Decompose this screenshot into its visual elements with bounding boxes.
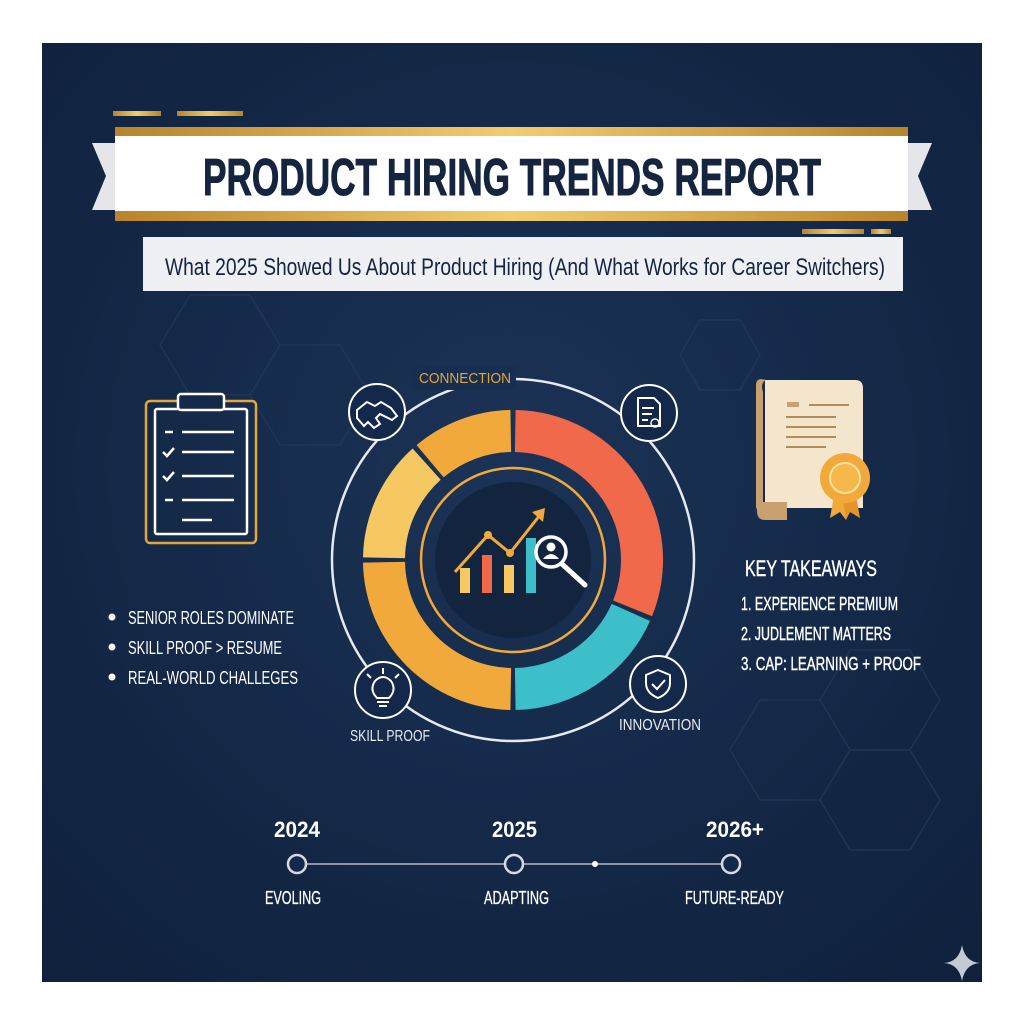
icon: handshake [349, 384, 405, 440]
donut diagram [332, 366, 701, 745]
timeline: FUTURE-READY [685, 888, 784, 908]
timeline [265, 817, 784, 908]
key takeaways: 2. JUDLEMENT MATTERS [741, 624, 891, 644]
icon: certificate scroll [756, 379, 870, 520]
key takeaways: KEY TAKEAWAYS [745, 556, 877, 581]
left bullets: SKILL PROOF > RESUME [128, 638, 282, 658]
label: INNOVATION: INNOVATION [619, 717, 701, 734]
timeline: 2026+ [706, 817, 764, 842]
icon: shield [630, 656, 686, 712]
left bullets: REAL-WORLD CHALLEGES [128, 668, 298, 688]
timeline: 2025 [492, 817, 537, 842]
icon: chart with magnifier [455, 508, 585, 593]
key takeaways [741, 556, 921, 674]
left bullets: SENIOR ROLES DOMINATE [128, 608, 294, 628]
decorative gold dashes [113, 111, 891, 234]
timeline: 2024 [274, 817, 321, 842]
label: SKILL PROOF: SKILL PROOF [350, 728, 430, 745]
key takeaways: 1. EXPERIENCE PREMIUM [741, 594, 898, 614]
sparkle [944, 945, 980, 981]
icon: document [621, 385, 677, 441]
icon: clipboard [146, 394, 256, 543]
subtitle [143, 237, 903, 291]
timeline: ADAPTING [484, 888, 549, 908]
key takeaways: 3. CAP: LEARNING + PROOF [741, 654, 921, 674]
timeline: EVOLING [265, 888, 321, 908]
title banner [92, 127, 932, 221]
label: CONNECTION: CONNECTION [419, 370, 511, 387]
left bullets [108, 608, 298, 688]
icon: lightbulb [355, 662, 411, 718]
